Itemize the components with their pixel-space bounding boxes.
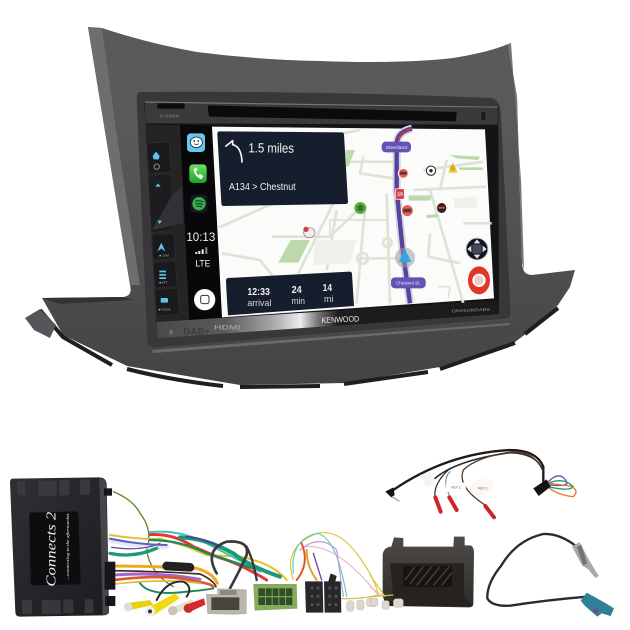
side buttons (145, 125, 189, 323)
side buttons: ■ ATT (159, 281, 167, 285)
directions card: A134 > Chestnut (229, 182, 296, 193)
side buttons: ■ VOICE (159, 307, 171, 311)
arrival card: 24 (292, 285, 302, 296)
icon: Spotify (191, 195, 207, 213)
arrival card: 12:33 (247, 287, 270, 298)
dash fascia panel (25, 27, 575, 387)
unit body (144, 101, 499, 338)
home button (194, 289, 215, 310)
top strip with disc slot (145, 101, 498, 125)
arrival card: 14 (323, 283, 332, 294)
lower brand strip (157, 301, 499, 338)
RCA plugs (124, 593, 205, 616)
lead labels (420, 472, 435, 487)
wiring bundle (110, 492, 378, 600)
Steerland label: Steerland (386, 145, 407, 151)
arrival card: arrival (247, 298, 271, 308)
directional control (466, 238, 488, 260)
lower brand strip: DAB+ (183, 326, 211, 336)
fascia lower edge clips (40, 308, 558, 387)
speed marker: 15 (397, 191, 403, 197)
white terminals (347, 598, 377, 611)
navigation route (397, 129, 412, 303)
directions card (217, 131, 348, 206)
DAB aerial adapter (487, 534, 614, 617)
interface box (10, 477, 115, 617)
speed marker (395, 189, 404, 199)
stereo remote lead (385, 450, 576, 517)
arrival card: min (291, 296, 305, 306)
arrival card (226, 272, 354, 315)
side buttons: ■ CAM (159, 253, 169, 257)
lower brand strip: KENWOOD (321, 314, 360, 325)
green connector (253, 584, 297, 611)
icon: phone (189, 164, 207, 183)
arrival card: mi (324, 294, 333, 304)
record button (468, 266, 490, 294)
control module (383, 537, 474, 607)
Steerland label (382, 142, 411, 152)
stereo remote lead: KEY 2 (451, 486, 461, 490)
map green areas (278, 150, 483, 263)
lower brand strip: 0 (169, 329, 173, 336)
directions card: 1.5 miles (248, 140, 294, 156)
ISO connectors (305, 573, 341, 613)
jack plug (385, 487, 395, 497)
Connects2 logo: ...connecting to the aftermarket (65, 512, 70, 580)
Connects2 logo: Connects 2 (45, 512, 60, 587)
Chestnut St label (391, 277, 426, 288)
head unit (137, 92, 511, 347)
side clip on fascia (25, 309, 56, 338)
red terminals (435, 497, 494, 517)
top strip with disc slot: GARMIN (160, 114, 179, 119)
Connects2 logo (45, 512, 70, 587)
stereo remote lead: KEY 1 (478, 486, 488, 490)
recess bezel (137, 92, 511, 347)
current position arrow (395, 248, 415, 268)
icon: turn arrow (225, 141, 242, 163)
lower brand strip: DNX5190DABS (452, 307, 490, 313)
icon: Waze (187, 133, 205, 152)
map screen (212, 127, 494, 317)
harness tail with terminals (370, 575, 403, 609)
Chestnut St label: Chestnut St. (396, 281, 421, 287)
map roads (219, 130, 492, 303)
CarPlay side column (180, 125, 223, 320)
signal bars (195, 247, 207, 254)
small black connector (533, 479, 551, 496)
lower brand strip: HDMI (214, 325, 241, 332)
grey vehicle connector (206, 588, 247, 615)
clock: 10:13 (186, 230, 215, 244)
map pins (303, 162, 458, 238)
steering wheel interface kit (10, 477, 378, 617)
accessories (370, 450, 614, 617)
LTE label: LTE (195, 258, 210, 268)
